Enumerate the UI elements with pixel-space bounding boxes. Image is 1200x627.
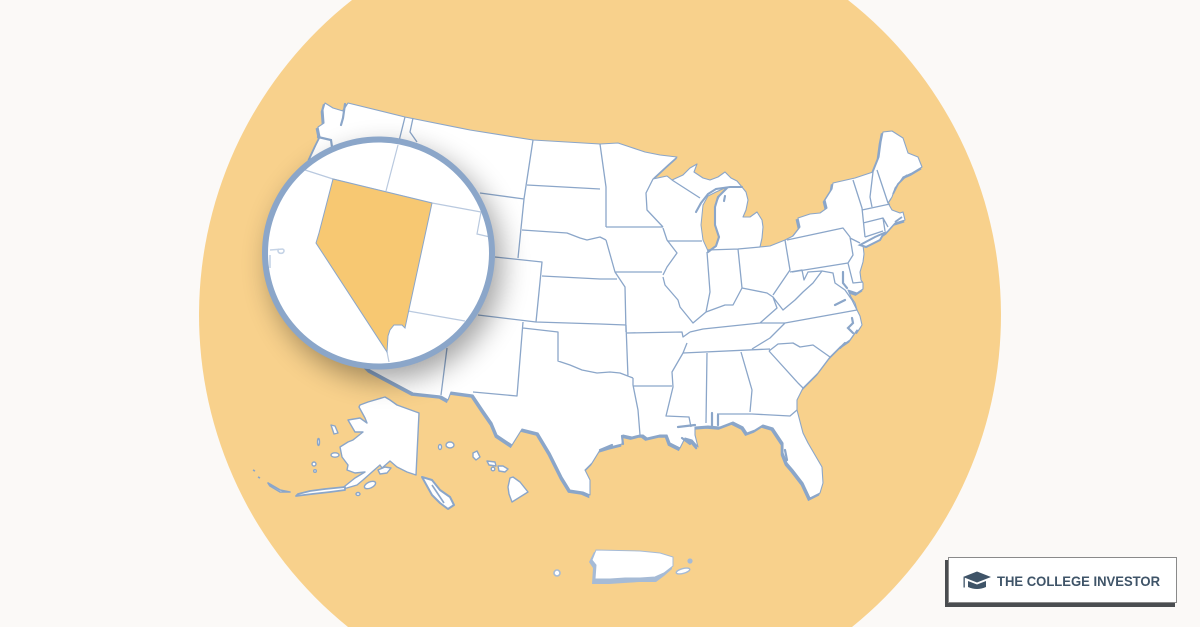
magnifier lens shadow [270, 148, 502, 380]
logo badge [945, 558, 1176, 607]
hawaii [438, 442, 528, 502]
aleutian chain [296, 487, 345, 496]
magnifier lens [265, 140, 492, 366]
lake shore accents [696, 187, 742, 252]
brand name: THE COLLEGE INVESTOR [997, 573, 1160, 589]
badge shadow [945, 560, 1175, 607]
lens ring [265, 140, 492, 366]
badge box [948, 558, 1176, 602]
alaska [253, 397, 454, 509]
coastal water details [318, 104, 853, 460]
maine coast accents [893, 175, 907, 222]
bering sea islands [331, 425, 338, 434]
puerto rico [554, 550, 693, 584]
lens white face [266, 140, 492, 366]
contiguous states [304, 103, 922, 500]
lake michigan [701, 187, 727, 251]
california lake [270, 249, 284, 268]
long island [860, 233, 884, 247]
map of the United States [253, 103, 922, 584]
nevada [316, 179, 432, 352]
kodiak and kenai [378, 467, 391, 474]
alaska panhandle [422, 477, 454, 509]
zoomed neighbour state borders [270, 145, 490, 362]
background circle [199, 0, 1001, 627]
state borders [398, 117, 890, 435]
icon: graduation cap [963, 572, 991, 589]
